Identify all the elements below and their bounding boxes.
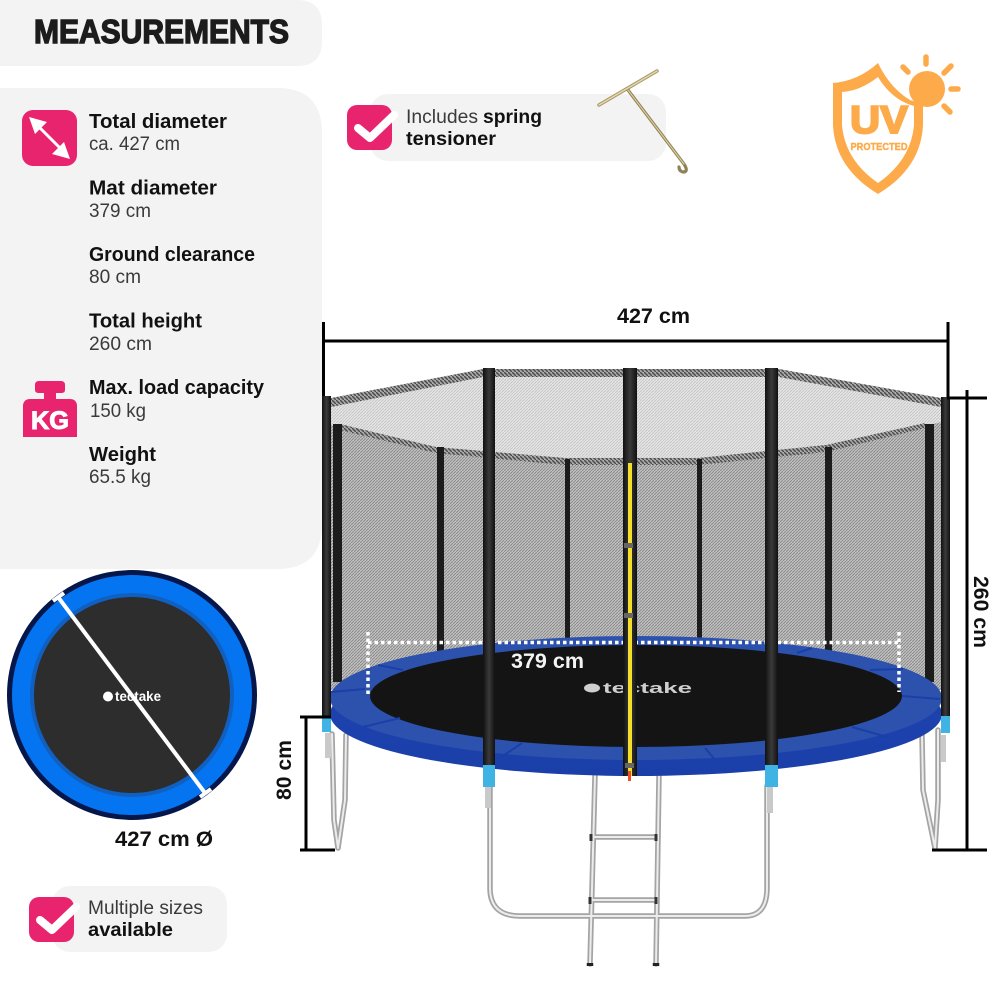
callout text: tensioner <box>406 129 497 150</box>
dimension: total height 260 cm: 260 cm <box>969 576 992 648</box>
trampoline top view diagram <box>7 570 257 820</box>
rear posts <box>333 424 934 682</box>
spec: total diameter: ca. 427 cm <box>89 134 180 155</box>
spec: ground clearance: Ground clearance <box>89 244 255 266</box>
spec: total height: 260 cm <box>89 334 152 355</box>
callout text: spring <box>483 107 542 128</box>
trampoline illustration <box>322 368 950 966</box>
dimension: total diameter 427 cm: 427 cm <box>617 305 690 328</box>
spec: ground clearance <box>89 244 255 288</box>
icon: UV protected shield: UV <box>850 99 908 142</box>
dimension: ground clearance 80 cm: 80 cm <box>273 740 296 800</box>
legs and ladder <box>332 730 938 966</box>
label: 379 cm: 379 cm <box>511 650 584 673</box>
icon: weight KG: KG <box>31 407 69 435</box>
callout text <box>88 898 203 941</box>
spec: weight <box>89 444 156 488</box>
mat logo: tectake <box>603 680 692 697</box>
spec: max load capacity <box>89 377 265 422</box>
callout: multiple sizes <box>29 886 227 952</box>
mat logo <box>584 680 692 697</box>
spec: total diameter <box>89 111 227 155</box>
dimension: total diameter 427 cm <box>322 305 949 398</box>
spec: total height: Total height <box>89 310 202 332</box>
callout text: Multiple sizes <box>88 898 203 919</box>
safety net <box>331 369 941 690</box>
spec: weight: 65.5 kg <box>89 467 151 488</box>
spec: max load capacity: 150 kg <box>90 401 146 422</box>
spec: max load capacity: Max. load capacity <box>89 377 265 399</box>
icon: diameter arrows <box>22 110 77 166</box>
callout text <box>406 107 542 150</box>
dimension: ground clearance 80 cm <box>273 717 335 850</box>
icon: check <box>29 897 76 942</box>
label: 427 cm diameter: 427 cm Ø <box>115 828 213 851</box>
spec: mat diameter: 379 cm <box>89 201 151 222</box>
entrance zipper <box>624 463 634 781</box>
icon: weight KG <box>23 381 77 437</box>
icon: spring tensioner tool <box>599 71 686 172</box>
front posts <box>322 368 950 813</box>
spec: mat diameter: Mat diameter <box>89 178 217 200</box>
logo: tectake <box>115 688 161 704</box>
spec: weight: Weight <box>89 444 156 466</box>
spec: total height <box>89 310 202 355</box>
icon: UV protected shield: PROTECTED <box>850 142 908 153</box>
callout text: available <box>88 920 173 941</box>
diameter line <box>53 593 211 797</box>
title panel <box>0 0 322 66</box>
dimension: total height 260 cm <box>932 390 992 850</box>
dotted mat measurement <box>368 632 899 696</box>
callout text: Includes <box>406 107 478 128</box>
spec: mat diameter <box>89 178 217 222</box>
trampoline frame and pad <box>330 636 942 776</box>
icon: UV protected shield <box>833 57 958 194</box>
icon: check <box>347 105 394 150</box>
title: MEASUREMENTS <box>34 13 289 50</box>
callout: spring tensioner <box>347 71 686 172</box>
spec: total diameter: Total diameter <box>89 111 227 133</box>
panel: measurements list <box>0 88 322 569</box>
spec: ground clearance: 80 cm <box>89 267 141 288</box>
